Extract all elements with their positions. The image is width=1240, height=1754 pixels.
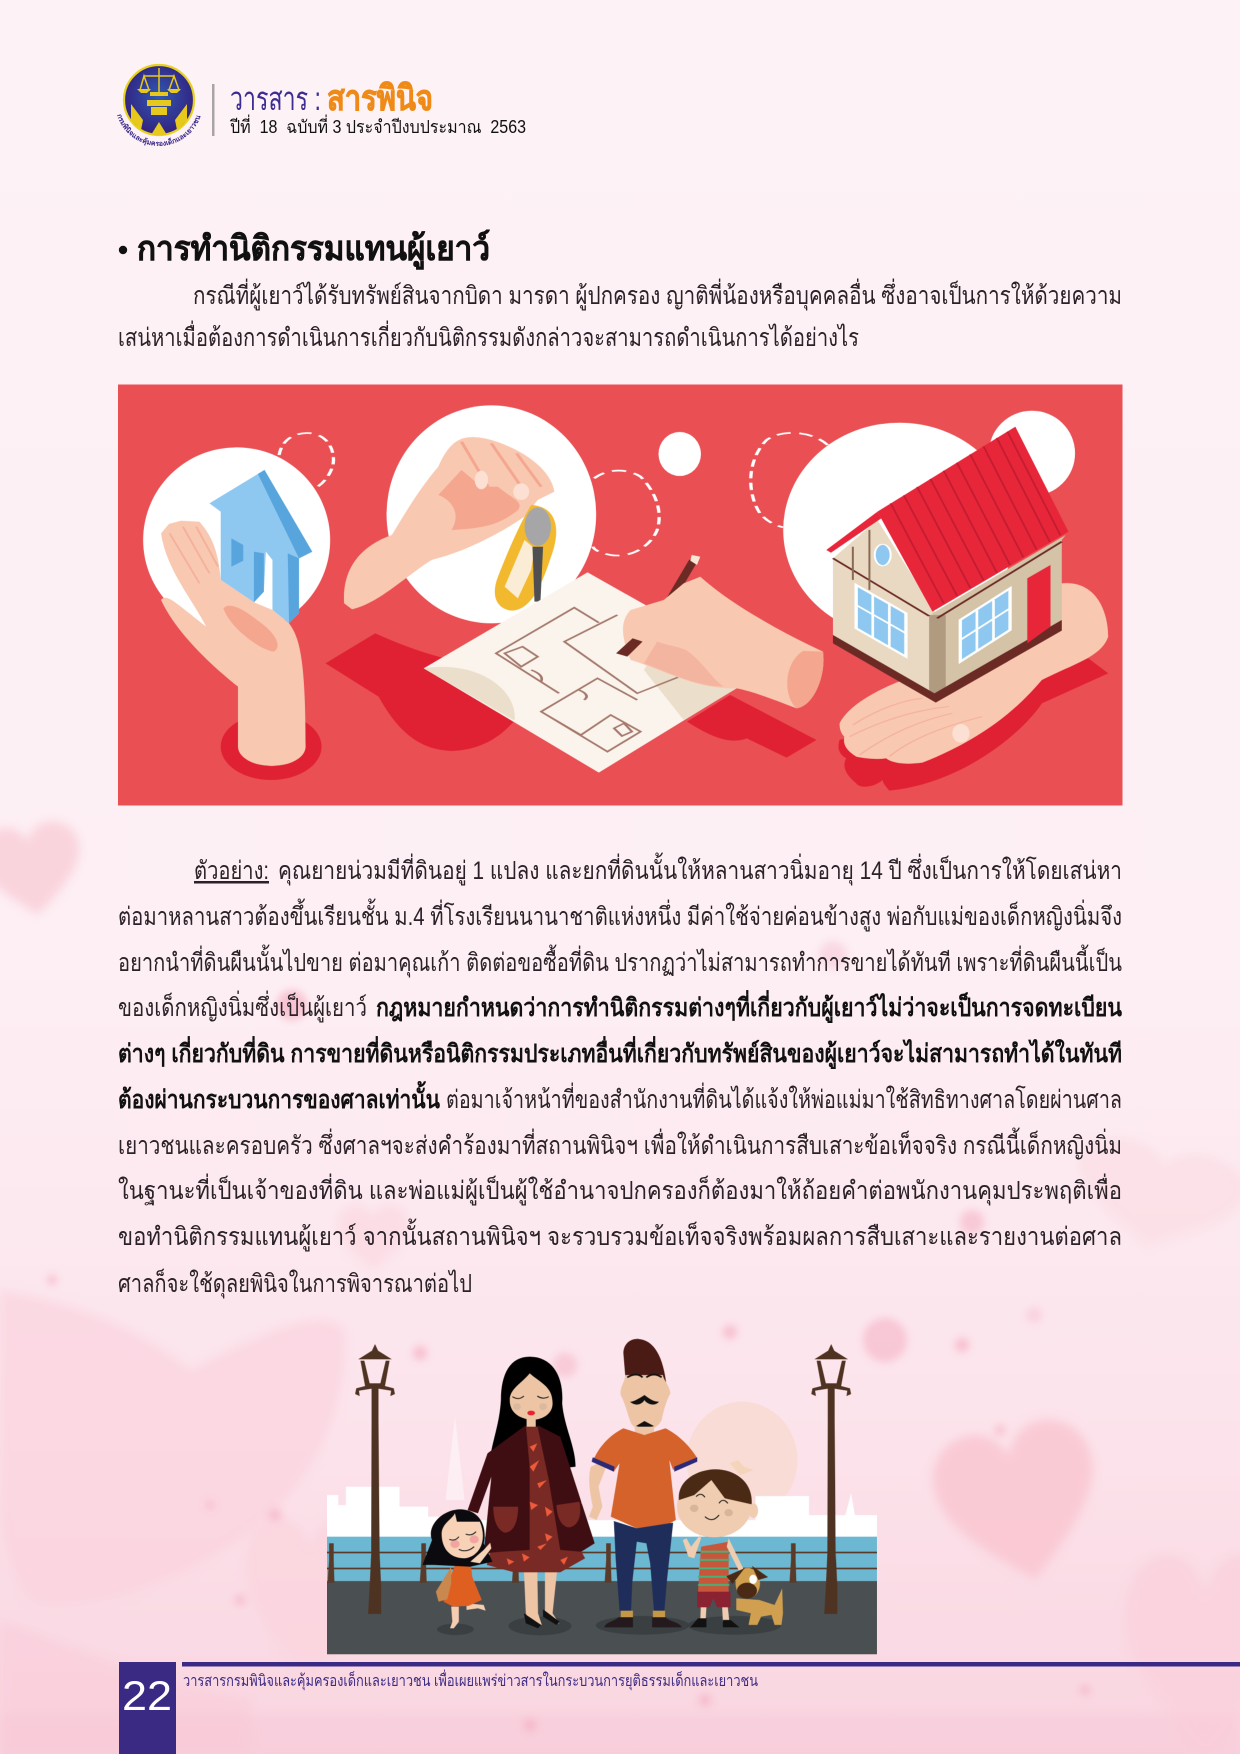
header: journal title: วารสาร : (230, 80, 321, 117)
dog (729, 1568, 783, 1625)
header: journal logo (117, 64, 201, 146)
footer: page number block (119, 1662, 176, 1754)
header: journal logo: กรมพินิจและคุ้มครองเด็กและเยาวชน (117, 114, 201, 146)
section heading: การทำนิติกรรมแทนผู้เยาว์ (137, 229, 490, 270)
family illustration (327, 1339, 877, 1654)
banner illustration: property transfer (118, 384, 1122, 806)
dashed rings (279, 433, 828, 556)
red shadows (221, 633, 1108, 791)
white discs (143, 405, 1075, 637)
example paragraph: ศาลก็จะใช้ดุลยพินิจในการพิจารณาต่อไป (118, 1268, 472, 1299)
example paragraph: ต้องผ่านกระบวนการของศาลเท่านั้น (118, 1080, 440, 1114)
icon: hand writing with pen (616, 555, 824, 708)
pavement (327, 1581, 877, 1654)
example paragraph: ในฐานะที่เป็นเจ้าของที่ดิน และพ่อแม่ผู้เป็นผู้ใช้อำนาจปกครองก็ต้องมาให้ถ้อยคำต่อพนักงานคุมประพฤติเพื่อ (118, 1173, 1122, 1206)
girl (422, 1509, 492, 1628)
boy (677, 1460, 758, 1627)
example paragraph (118, 852, 1122, 1299)
example paragraph: ตัวอย่าง: (194, 857, 269, 885)
street lamps (355, 1344, 851, 1614)
intro paragraph (118, 278, 1122, 352)
example paragraph: ขอทำนิติกรรมแทนผู้เยาว์ จากนั้นสถานพินิจฯ จะรวบรวมข้อเท็จจริงพร้อมผลการสืบเสาะและรายงานต่อศาล (118, 1218, 1122, 1252)
water (327, 1537, 877, 1581)
father (589, 1339, 697, 1627)
mother (468, 1357, 595, 1628)
icon: hand with keys (344, 437, 556, 611)
footer: page number block: 22 (122, 1672, 172, 1719)
footer rule (182, 1662, 1240, 1666)
faint tower (445, 1417, 465, 1500)
header: issue line: ปีที่ 18 ฉบับที่ 3 ประจำปีงบประมาณ 2563 (230, 114, 526, 137)
city skyline (327, 1487, 877, 1537)
icon: open hand holding house (161, 521, 306, 766)
icon: hand under house (840, 583, 1108, 764)
header divider (212, 84, 214, 136)
example paragraph: กฎหมายกำหนดว่าการทำนิติกรรมต่างๆที่เกี่ยวกับผู้เยาว์ไม่ว่าจะเป็นการจดทะเบียน (376, 990, 1122, 1024)
header: journal title: สารพินิจ (327, 79, 433, 118)
icon: blue house (209, 470, 312, 623)
header: journal title (230, 79, 433, 118)
intro paragraph: เสน่หาเมื่อต้องการดำเนินการเกี่ยวกับนิติกรรมดังกล่าวจะสามารถดำเนินการได้อย่างไร (118, 320, 859, 352)
figure shadows (437, 1616, 781, 1635)
icon: red roof house (826, 427, 1068, 703)
example paragraph: ของเด็กหญิงนิ่มซึ่งเป็นผู้เยาว์ (118, 990, 367, 1023)
footer caption: วารสารกรมพินิจและคุ้มครองเด็กและเยาวชน เพื่อเผยแพร่ข่าวสารในกระบวนการยุติธรรมเด็กและเยาวชน (183, 1669, 758, 1691)
icon: floor plan sheet (424, 572, 763, 773)
railing (327, 1543, 877, 1583)
